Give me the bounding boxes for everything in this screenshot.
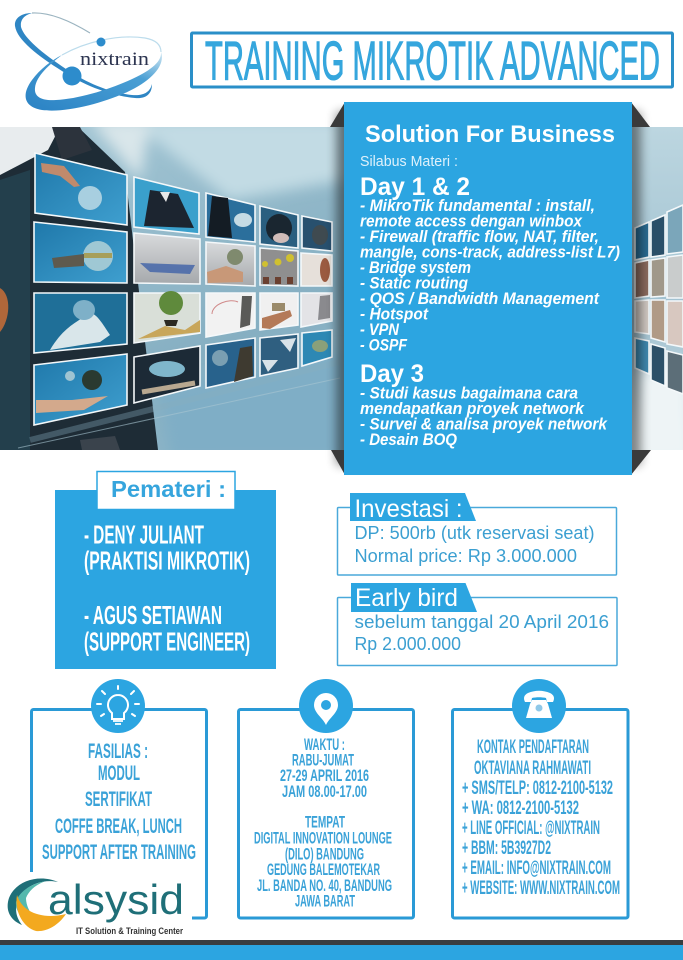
suit figure — [0, 127, 158, 450]
investasi tab: Investasi : — [354, 495, 462, 523]
speaker 1: - DENY JULIANT — [84, 520, 204, 550]
day 1 and 2: mangle, cons-track, address-list L7) — [360, 244, 620, 262]
day 1 and 2: - Bridge system — [360, 259, 471, 277]
pemateri label: Pemateri : — [111, 476, 226, 502]
day 3: Day 3 — [360, 360, 424, 388]
day 1 and 2: - QOS / Bandwidth Management — [360, 290, 600, 308]
logo wordmark: nixtrain — [80, 49, 150, 70]
icon: telephone — [512, 679, 566, 733]
hero photo: digital screens wall — [0, 120, 683, 460]
schedule text: WAKTU : — [304, 735, 345, 754]
schedule text: JAM 08.00-17.00 — [282, 782, 367, 801]
panel: early bird — [338, 583, 617, 666]
panel: early bird: Rp 2.000.000 — [354, 634, 461, 654]
venue text: GEDUNG BALEMOTEKAR — [267, 860, 380, 879]
icon: map pin — [299, 679, 353, 733]
panel heading: Solution For Business — [365, 121, 615, 148]
screens column 5 — [301, 216, 332, 366]
venue text — [254, 812, 392, 910]
early bird tab: Early bird — [355, 584, 458, 612]
day 1 and 2: - Hotspot — [360, 306, 429, 324]
day 3 — [360, 360, 608, 449]
screens column 4 — [260, 206, 298, 376]
day 1 and 2: Day 1 & 2 — [360, 173, 470, 201]
calsysid tagline: IT Solution & Training Center — [76, 926, 184, 936]
speaker 2: - AGUS SETIAWAN — [84, 600, 222, 630]
day 1 and 2: - MikroTik fundamental : install, — [360, 197, 595, 215]
screens column 3 — [206, 193, 255, 388]
venue text: JAWA BARAT — [295, 892, 355, 910]
panel: investasi: Normal price: Rp 3.000.000 — [354, 546, 577, 566]
logo: nixtrain — [15, 13, 162, 111]
card: kontak — [452, 679, 628, 918]
day 3: - Desain BOQ — [360, 431, 457, 449]
facilities list: COFFE BREAK, LUNCH — [55, 815, 182, 838]
early bird text: sebelum tanggal 20 April 2016 — [354, 612, 609, 632]
venue text: DIGITAL INNOVATION LOUNGE — [254, 828, 392, 848]
logo: calsysid — [0, 872, 192, 938]
panel: pemateri — [55, 472, 276, 669]
contact details — [462, 737, 620, 899]
day 3: - Survei & analisa proyek network — [360, 416, 608, 434]
screens column 1 — [34, 153, 127, 425]
schedule text: 27-29 APRIL 2016 — [280, 766, 369, 785]
venue text: (DILO) BANDUNG — [285, 844, 364, 864]
contact details: + BBM: 5B3927D2 — [462, 838, 551, 859]
day 1 and 2 — [360, 173, 620, 354]
syllabus label: Silabus Materi : — [360, 154, 458, 170]
title banner — [192, 30, 672, 92]
speaker 2 — [84, 600, 250, 656]
footer bar — [0, 940, 683, 960]
pemateri label — [97, 472, 235, 510]
schedule text — [280, 735, 369, 801]
contact details: + WA: 0812-2100-5132 — [462, 798, 579, 819]
speaker 1: (PRAKTISI MIKROTIK) — [84, 546, 250, 576]
card: fasilitas — [32, 679, 206, 918]
day 3: - Studi kasus bagaimana cara — [360, 384, 578, 402]
facilities list: SUPPORT AFTER TRAINING — [42, 841, 196, 864]
screens right side — [635, 205, 683, 394]
day 1 and 2: - VPN — [360, 321, 400, 339]
syllabus panel — [330, 102, 651, 475]
day 1 and 2: - Firewall (traffic flow, NAT, filter, — [360, 228, 599, 246]
ribbon folds — [330, 102, 651, 475]
day 1 and 2: remote access dengan winbox — [360, 212, 583, 230]
panel: investasi — [338, 493, 616, 575]
card: waktu dan tempat — [238, 679, 414, 918]
icon: light bulb — [91, 679, 145, 733]
facilities list: MODUL — [98, 762, 140, 785]
facilities list: FASILIAS : — [88, 740, 148, 763]
schedule text: RABU-JUMAT — [292, 750, 354, 770]
facilities list: SERTIFIKAT — [85, 788, 152, 811]
day 1 and 2: - OSPF — [360, 336, 408, 354]
day 1 and 2: - Static routing — [360, 274, 468, 292]
facilities list — [42, 740, 196, 864]
calsysid wordmark: alsysid — [48, 876, 184, 923]
investasi text: DP: 500rb (utk reservasi seat) — [354, 523, 594, 543]
speaker 2: (SUPPORT ENGINEER) — [84, 626, 250, 656]
speaker 1 — [84, 520, 250, 576]
screens column 2 — [134, 177, 200, 403]
venue text: JL. BANDA NO. 40, BANDUNG — [257, 876, 392, 895]
day 3: mendapatkan proyek network — [360, 400, 585, 418]
venue text: TEMPAT — [305, 812, 345, 832]
